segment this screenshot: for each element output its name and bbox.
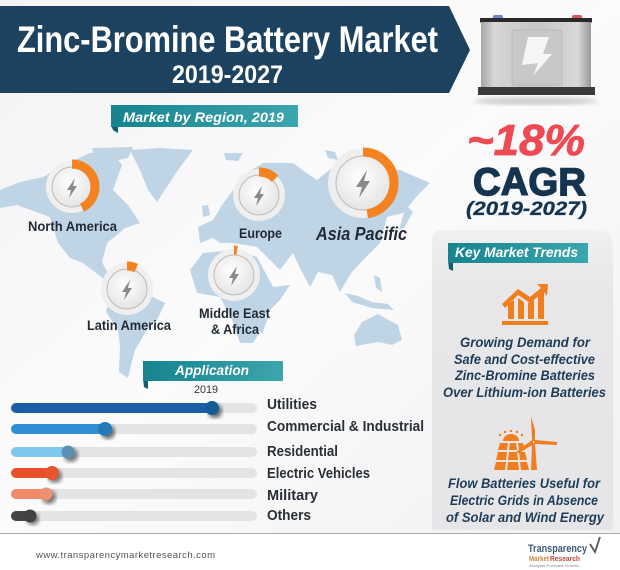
logo: Transparency Market Research: Analysis Forecast Growth [529,564,579,568]
ribbon: key market trends: Key Market Trends [455,245,578,260]
logo: Transparency Market Research: Transparency [528,543,588,555]
year label: 2019 [194,384,218,396]
ribbon: market by region: Market by Region, 2019 [123,109,284,125]
label: North America [28,218,117,234]
label: Middle East [199,305,270,321]
CAGR value: ~18% [467,116,585,165]
bar: Electric Vehicles [11,466,370,483]
logo: Transparency Market Research [528,537,600,568]
text: growing demand: Growing Demand for [460,334,591,350]
title: Zinc-Bromine Battery Market [17,19,438,60]
icon: battery [474,15,598,105]
text: growing demand [443,334,606,400]
donut: Middle East & Africa [199,249,270,337]
text: growing demand: Over Lithium-ion Batteries [443,384,606,400]
label: Asia Pacific [315,224,407,244]
label: Electric Vehicles [267,466,370,482]
title banner [0,6,470,93]
bar: Military [11,488,318,504]
logo: Transparency Market Research: Research [550,556,580,563]
text: flow batteries: Electric Grids in Absence [450,492,598,508]
ribbon: key market trends [448,243,588,271]
bar: Commercial & Industrial [11,419,424,439]
donut: Middle East & Africa: & Africa [211,321,259,337]
label: Latin America [87,317,171,333]
bar: Utilities [11,397,317,418]
label: Military [267,488,318,504]
panel: key market trends [432,230,613,530]
donut: Latin America [87,263,171,333]
label: Others [267,508,311,524]
donut: Europe [233,169,285,241]
world map [0,147,430,378]
bar: Residential [11,444,338,462]
text: growing demand: Safe and Cost-effective [454,351,595,367]
logo: Transparency Market Research: Market [529,556,550,563]
label: Europe [239,225,282,241]
label: Commercial & Industrial [267,419,424,435]
footer url: www.transparencymarketresearch.com [35,550,215,561]
icon: growth chart [502,284,548,325]
text: flow batteries: Flow Batteries Useful for [448,475,601,491]
text: flow batteries: of Solar and Wind Energy [446,509,605,525]
text: flow batteries [446,475,605,525]
donut: North America [28,161,117,234]
ribbon: application: Application [174,362,249,378]
label: Residential [267,444,338,460]
ribbon: application [143,361,283,389]
CAGR callout [466,116,587,220]
CAGR years: (2019-2027) [466,199,587,220]
donut: Asia Pacific [315,148,407,244]
CAGR label: CAGR [473,161,586,204]
text: growing demand: Zinc-Bromine Batteries [454,367,595,383]
bar: Others [11,508,311,525]
icon: solar panel and wind turbine [494,416,557,470]
years subtitle: 2019-2027 [172,61,283,89]
ribbon: market by region [111,105,298,133]
label: Utilities [267,397,317,413]
